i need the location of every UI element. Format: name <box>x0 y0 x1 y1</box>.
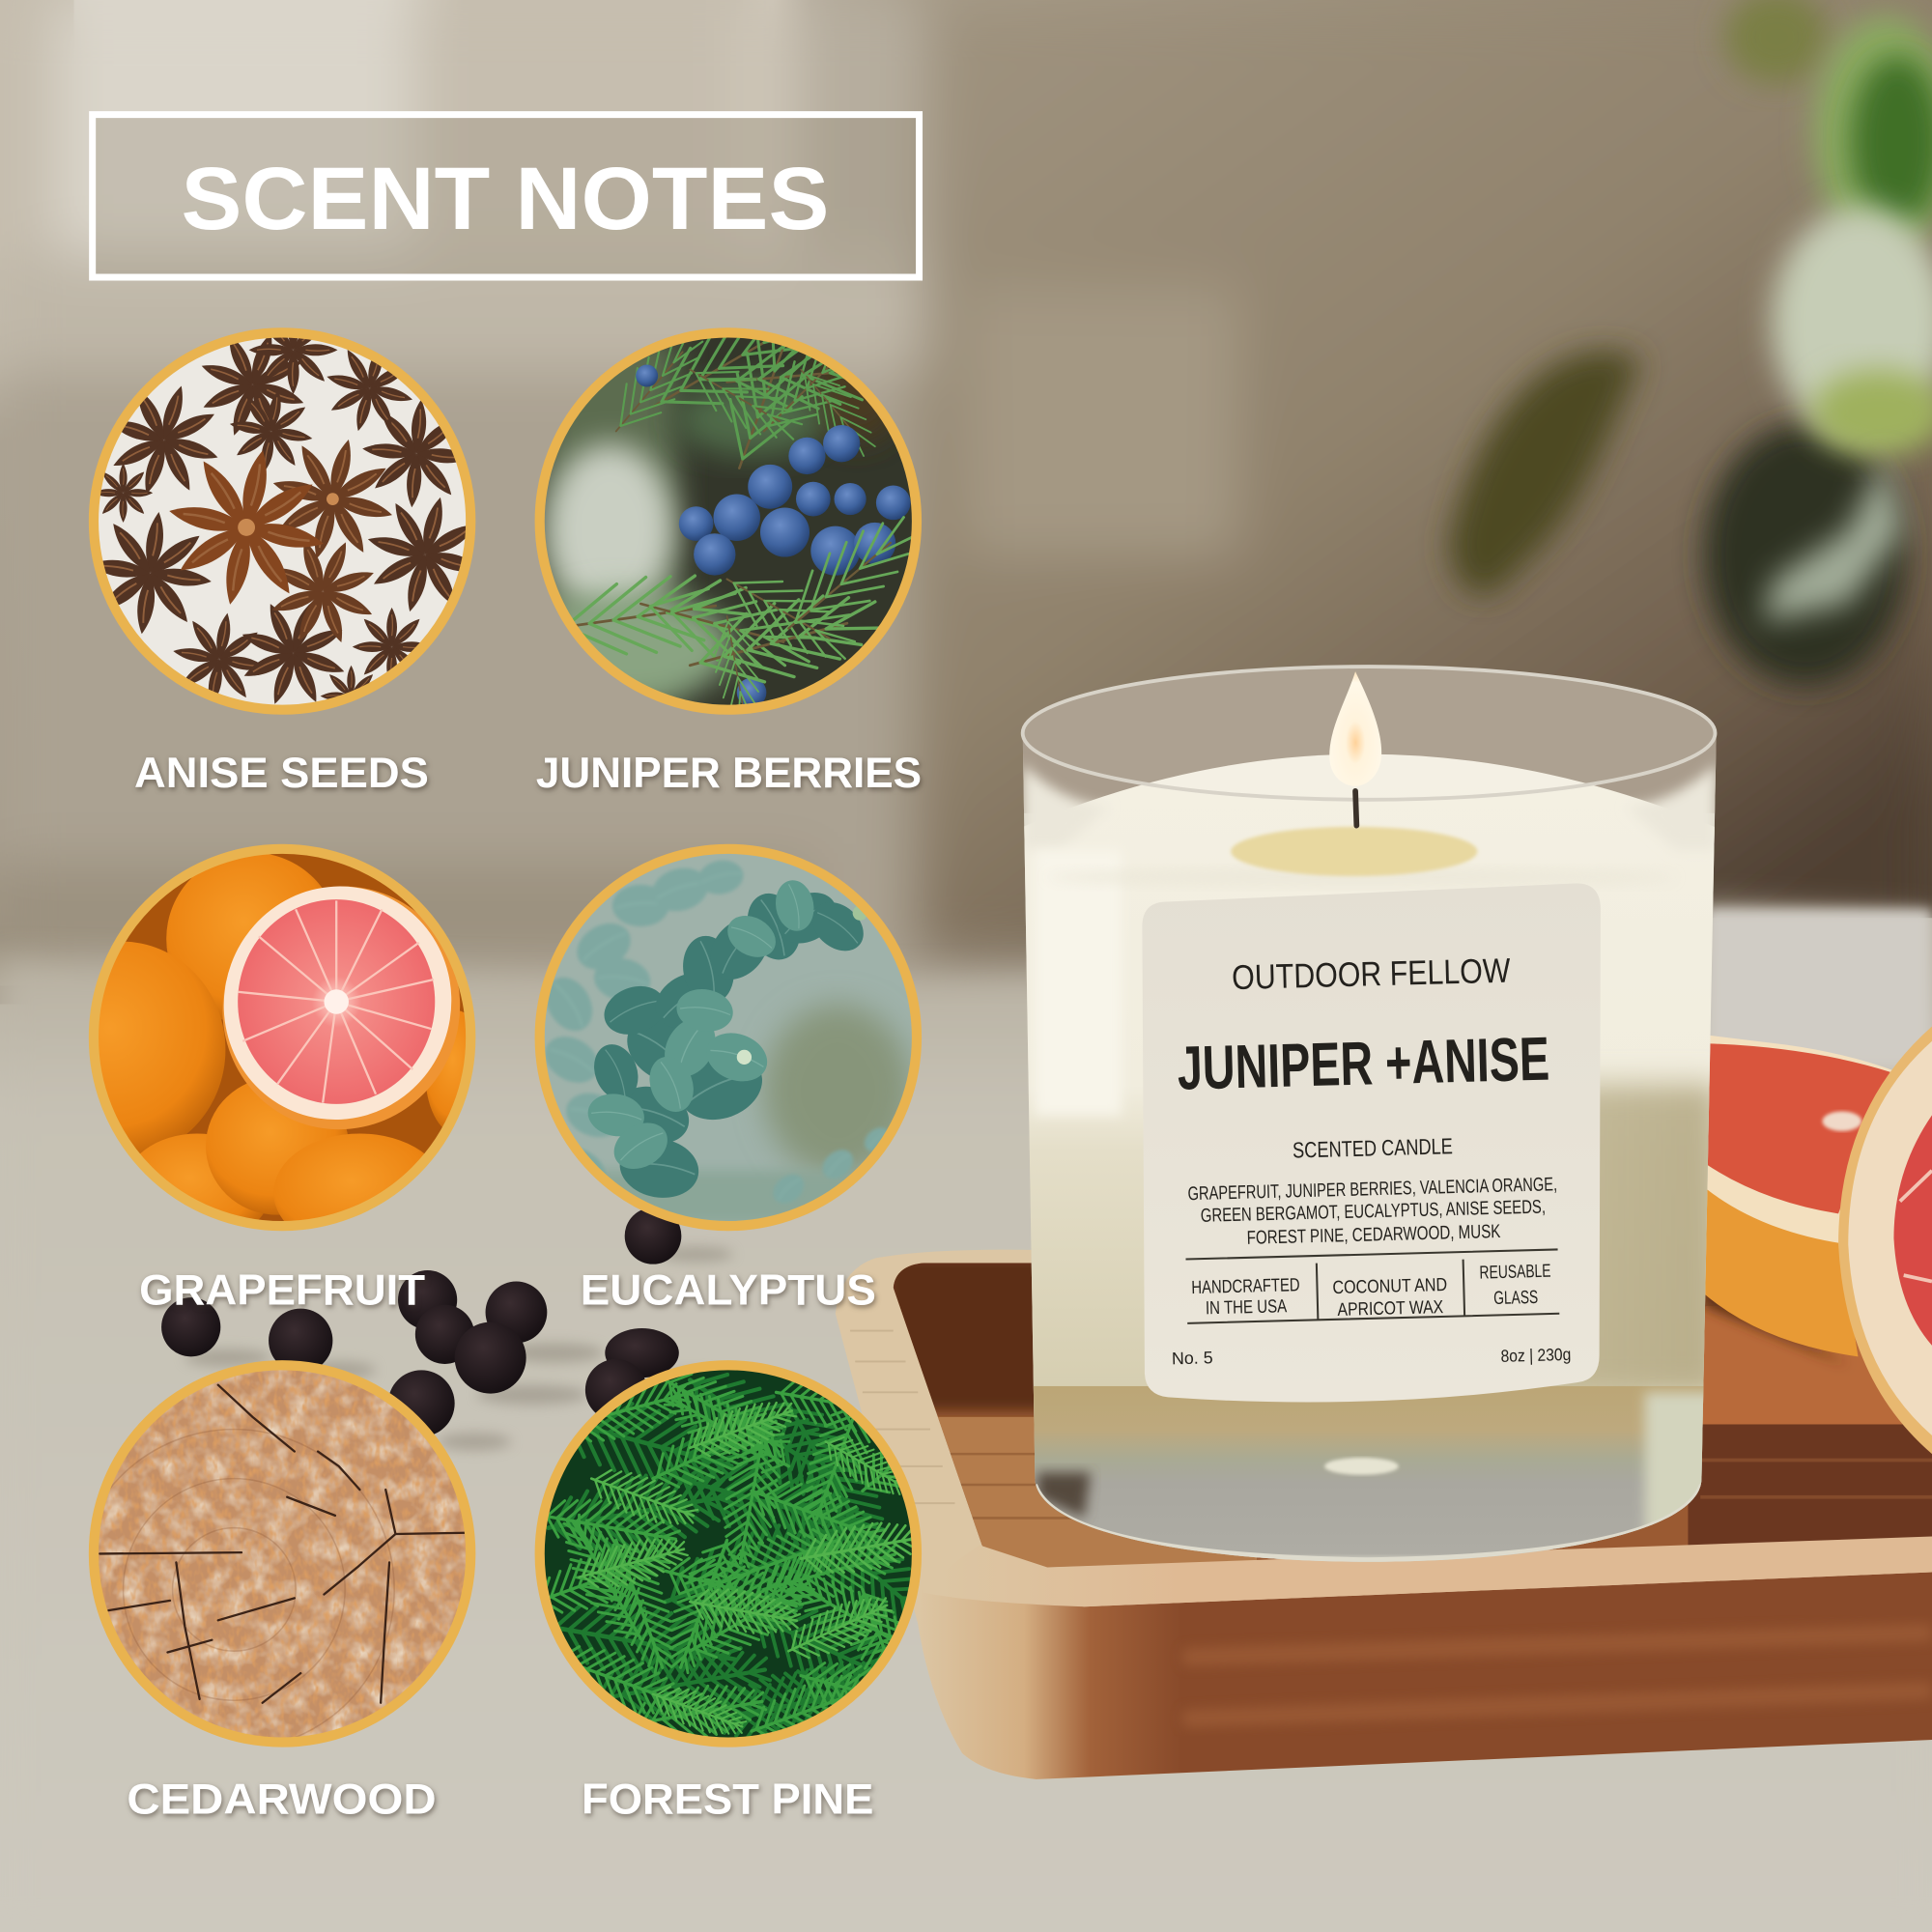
label ingredients: GREEN BERGAMOT, EUCALYPTUS, ANISE SEEDS, <box>1201 1197 1546 1227</box>
tray front face <box>918 1573 1932 1779</box>
scattered juniper berries on the table <box>161 1208 733 1450</box>
label number and weight: No. 5 <box>1172 1348 1213 1368</box>
label: cedarwood: CEDARWOOD <box>127 1776 437 1824</box>
label scent name: JUNIPER +ANISE <box>1177 1024 1550 1103</box>
note: grapefruit <box>89 844 475 1231</box>
candle label <box>1142 883 1601 1403</box>
label feature columns: IN THE USA <box>1206 1296 1288 1319</box>
label: anise seeds: ANISE SEEDS <box>134 750 429 797</box>
label feature columns: HANDCRAFTED <box>1191 1275 1300 1298</box>
label ingredients: FOREST PINE, CEDARWOOD, MUSK <box>1246 1221 1501 1249</box>
label number and weight <box>1172 1339 1572 1375</box>
note: forest pine <box>535 1360 922 1747</box>
label feature columns: GLASS <box>1493 1288 1538 1309</box>
label feature columns <box>1191 1262 1552 1324</box>
label: forest pine: FOREST PINE <box>582 1776 873 1824</box>
note: cedarwood <box>74 1365 470 1749</box>
note: anise seeds <box>89 327 475 715</box>
label: juniper berries: JUNIPER BERRIES <box>536 750 922 797</box>
note labels <box>127 750 922 1824</box>
label ingredients: GRAPEFRUIT, JUNIPER BERRIES, VALENCIA ORANGE, <box>1187 1174 1557 1205</box>
label ingredients <box>1187 1174 1559 1250</box>
candle in glass jar <box>1020 653 1719 1589</box>
tray front lip <box>922 1537 1932 1606</box>
label number and weight: 8oz | 230g <box>1500 1345 1572 1366</box>
jar rim <box>1023 667 1716 800</box>
label: grapefruit: GRAPEFRUIT <box>139 1267 425 1315</box>
grapefruit half at right edge <box>1838 1026 1932 1454</box>
wooden tray <box>836 1250 1932 1779</box>
title text: SCENT NOTES <box>182 150 829 248</box>
tray inner floor <box>887 1257 1932 1567</box>
background plant leaves, blurred <box>1449 0 1932 685</box>
grapefruit wedge behind candle <box>1704 1035 1897 1365</box>
candle flame and wick <box>1329 671 1381 826</box>
note: juniper berries <box>535 327 922 715</box>
label feature columns: COCONUT AND <box>1332 1275 1447 1298</box>
label feature columns: APRICOT WAX <box>1337 1297 1444 1321</box>
title box <box>93 115 920 277</box>
jar glass upper section <box>1020 653 1719 1589</box>
label brand: OUTDOOR FELLOW <box>1232 952 1511 997</box>
label: eucalyptus: EUCALYPTUS <box>581 1267 876 1315</box>
label feature columns: REUSABLE <box>1479 1262 1551 1284</box>
note: eucalyptus <box>537 849 917 1226</box>
label type: SCENTED CANDLE <box>1293 1133 1453 1163</box>
